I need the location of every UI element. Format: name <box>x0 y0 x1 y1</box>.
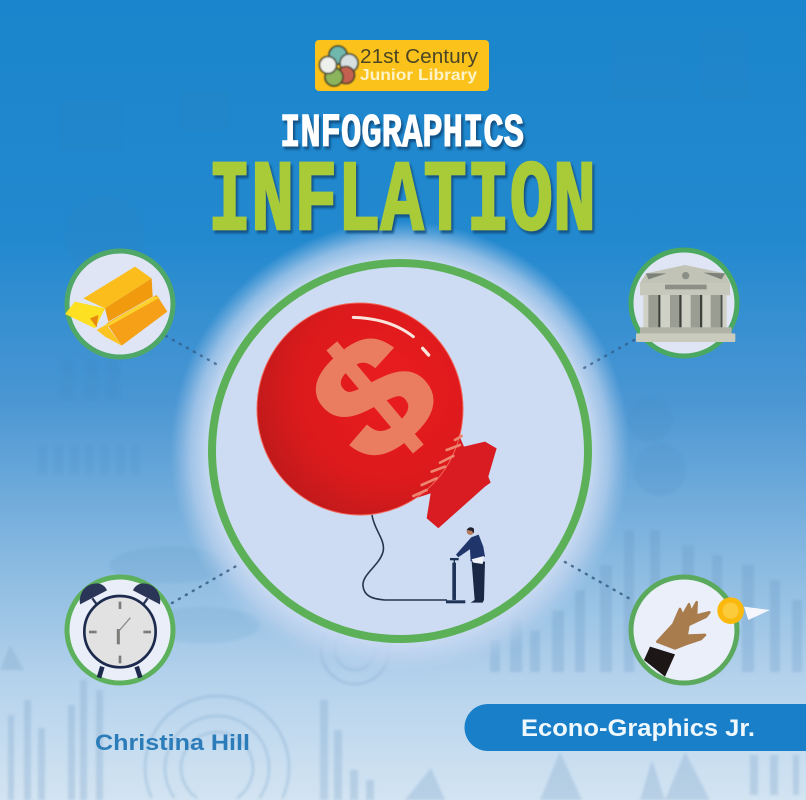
connector: hand to centre <box>565 562 632 600</box>
series title: INFOGRAPHICS <box>280 108 524 161</box>
centre glow <box>170 221 630 681</box>
publisher logo <box>315 40 489 91</box>
series badge <box>464 704 806 751</box>
series badge: Econo-Graphics Jr. <box>521 715 755 742</box>
businessman <box>456 527 485 603</box>
balloon body <box>257 303 463 515</box>
hand pump <box>446 558 465 603</box>
balloon hose <box>363 515 447 600</box>
icon: clover <box>320 46 358 86</box>
connector: clock to centre <box>172 565 238 603</box>
icon: alarm clock <box>67 577 173 683</box>
connector: bank to centre <box>584 340 634 368</box>
balloon illustration <box>257 295 497 603</box>
icon: hand reaching for flying coin <box>631 577 770 683</box>
balloon tie stripes <box>413 436 462 496</box>
publisher logo: Junior Library <box>360 67 477 84</box>
author name: Christina Hill <box>95 730 250 755</box>
balloon highlights <box>353 317 429 355</box>
icon: gold bars <box>65 251 173 357</box>
connector: gold to centre <box>166 336 216 364</box>
publisher logo: 21st Century <box>360 46 478 68</box>
main circle <box>212 263 588 639</box>
dollar sign: $ <box>278 295 469 497</box>
main title: INFLATION <box>208 147 596 260</box>
balloon tied end <box>410 433 497 528</box>
icon: bank building <box>631 250 737 356</box>
